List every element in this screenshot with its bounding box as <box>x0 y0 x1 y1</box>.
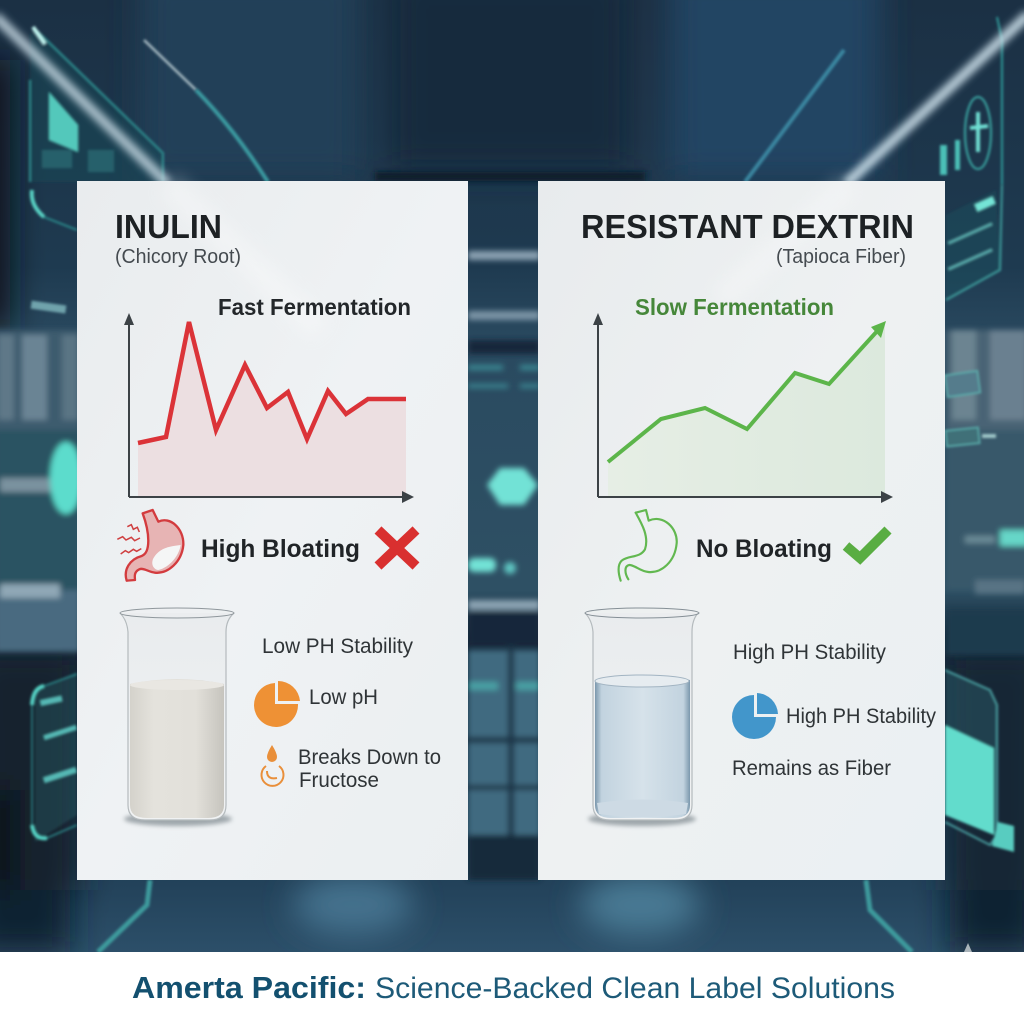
text: high ph stability: High PH Stability <box>733 641 886 664</box>
icon: calm stomach <box>619 510 677 581</box>
footer band <box>0 943 1024 1024</box>
text: remains as fiber: Remains as Fiber <box>732 757 891 780</box>
text: low ph stability: Low PH Stability <box>262 635 413 658</box>
text: breaks down to fructose: Breaks Down to <box>298 746 441 769</box>
text: low ph: Low pH <box>309 686 378 709</box>
beaker: milky solution <box>120 608 234 826</box>
chart title: slow fermentation: Slow Fermentation <box>635 294 834 320</box>
icon: bloated stomach <box>117 510 183 581</box>
holographic HUD: top right <box>940 17 1002 185</box>
holographic HUD: top left <box>30 27 163 182</box>
holographic HUD: lower right <box>945 670 1014 852</box>
subheading: chicory root: (Chicory Root) <box>115 246 241 268</box>
beaker: clear solution <box>585 608 699 826</box>
panel: inulin <box>77 181 468 880</box>
text: breaks down to fructose <box>298 746 441 792</box>
line chart: slow fermentation <box>593 313 893 503</box>
holographic HUD: lower left <box>32 672 77 842</box>
heading: resistant dextrin: RESISTANT DEXTRIN <box>581 208 914 245</box>
icon: blue pie <box>732 693 778 739</box>
text: breaks down to fructose: Fructose <box>299 769 379 792</box>
heading: inulin: INULIN <box>115 208 222 245</box>
holographic HUD: mid right boxes <box>945 185 1002 447</box>
icon: green check <box>846 530 888 558</box>
text: high ph stability label: High PH Stability <box>786 705 936 728</box>
icon: drop and swirl <box>262 745 284 786</box>
subheading: tapioca fiber: (Tapioca Fiber) <box>776 246 906 268</box>
footer tagline: Science-Backed Clean Label Solutions <box>375 972 895 1005</box>
icon: red cross <box>378 530 416 566</box>
label: no bloating: No Bloating <box>696 535 832 563</box>
label: high bloating: High Bloating <box>201 535 360 563</box>
panel: resistant dextrin <box>538 181 945 880</box>
icon: orange pie <box>254 681 300 727</box>
line chart: fast fermentation <box>124 313 414 503</box>
chart title: fast fermentation: Fast Fermentation <box>218 294 411 320</box>
holographic label: mid left <box>31 190 77 313</box>
footer brand name: Amerta Pacific: <box>132 970 366 1005</box>
